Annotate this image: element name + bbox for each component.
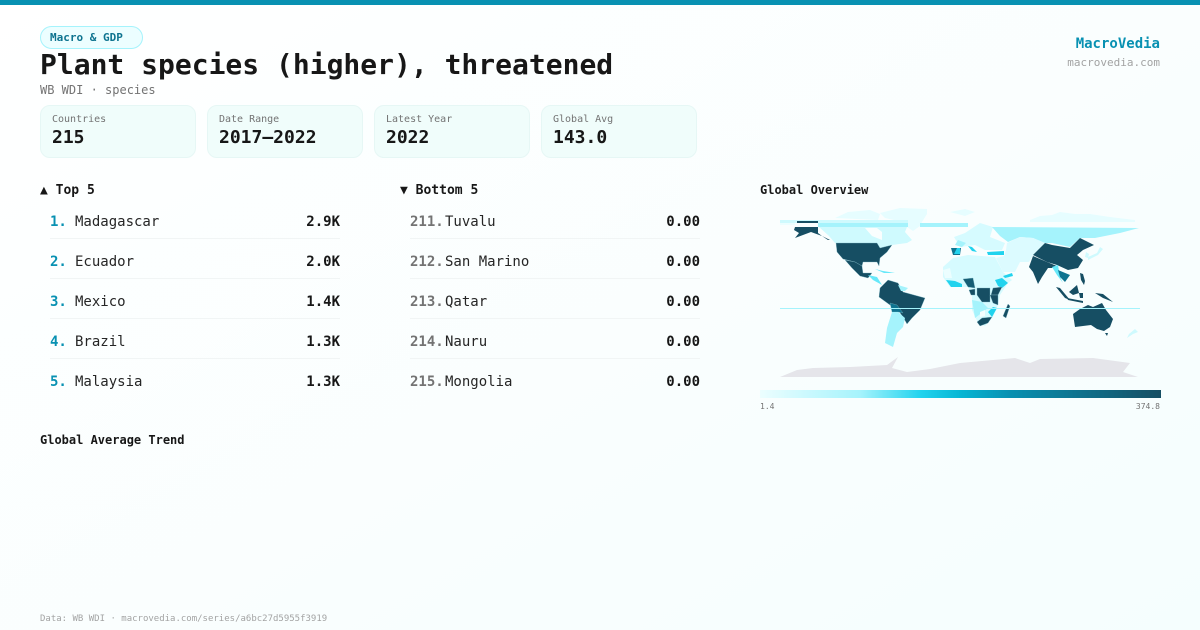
stat card: date range: 2017–2022 bbox=[219, 127, 317, 148]
stat card: latest year bbox=[374, 105, 530, 158]
brand url: macrovedia.com bbox=[1067, 56, 1160, 69]
India bbox=[1029, 256, 1057, 284]
row: Tuvalu: Tuvalu bbox=[445, 214, 496, 230]
legend maximum: 374.8 bbox=[1136, 402, 1160, 411]
row: Ecuador bbox=[50, 254, 340, 279]
Europe bbox=[951, 223, 1005, 255]
Russia bbox=[992, 227, 1139, 247]
Southeast Asia islands bbox=[1056, 273, 1113, 303]
row: Nauru: 214. bbox=[410, 334, 444, 350]
heading: global average trend: Global Average Trend bbox=[40, 433, 184, 447]
Japan and Korea bbox=[1085, 247, 1103, 260]
subtitle: WB WDI · species bbox=[40, 83, 156, 97]
row: Qatar bbox=[410, 294, 700, 319]
Australia bbox=[1073, 303, 1113, 331]
top accent bar bbox=[0, 0, 1200, 5]
row: Qatar: Qatar bbox=[445, 294, 487, 310]
row: Tuvalu: 0.00 bbox=[666, 214, 700, 230]
stat card: countries: Countries bbox=[52, 114, 106, 125]
equator artifact line bbox=[780, 308, 1140, 309]
row: Qatar: 0.00 bbox=[666, 294, 700, 310]
row: San Marino: 212. bbox=[410, 254, 444, 270]
row: Mexico: 3. bbox=[50, 294, 67, 310]
stat card: global average bbox=[541, 105, 697, 158]
row: Qatar: 213. bbox=[410, 294, 444, 310]
row: Brazil: 1.3K bbox=[306, 334, 340, 350]
row: Nauru: Nauru bbox=[445, 334, 487, 350]
row: Ecuador: 2.0K bbox=[306, 254, 340, 270]
footer source: Data: WB WDI · macrovedia.com/series/a6bc27d5955f3919 bbox=[40, 614, 327, 624]
row: Tuvalu: 211. bbox=[410, 214, 444, 230]
row: Brazil bbox=[50, 334, 340, 359]
row: Madagascar: 1. bbox=[50, 214, 67, 230]
Africa dark countries bbox=[963, 278, 1010, 326]
panel: bottom 5 list bbox=[410, 214, 700, 390]
row: Madagascar bbox=[50, 214, 340, 239]
Africa pale base bbox=[943, 255, 1012, 326]
heading: bottom 5: ▼ Bottom 5 bbox=[400, 183, 478, 198]
row: Mongolia: Mongolia bbox=[445, 374, 512, 390]
heading: top 5: ▲ Top 5 bbox=[40, 183, 95, 198]
stat card: countries bbox=[40, 105, 196, 158]
stat card: global average: 143.0 bbox=[553, 127, 607, 148]
category pill: Macro & GDP bbox=[50, 31, 123, 44]
heading: global overview: Global Overview bbox=[760, 183, 868, 197]
stat card: countries: 215 bbox=[52, 127, 85, 148]
Africa patches bbox=[943, 268, 988, 318]
panel: top 5 list bbox=[50, 214, 340, 390]
Southeast Asia mainland bbox=[1052, 265, 1070, 283]
row: Mongolia: 215. bbox=[410, 374, 444, 390]
colour scale legend bbox=[760, 390, 1161, 398]
arctic stripes bbox=[780, 220, 968, 227]
row: Malaysia: Malaysia bbox=[75, 374, 142, 390]
stat card: latest year: 2022 bbox=[386, 127, 429, 148]
Central America and Caribbean bbox=[868, 269, 895, 285]
row: Mongolia: 0.00 bbox=[666, 374, 700, 390]
New Zealand bbox=[1127, 329, 1138, 338]
row: San Marino: San Marino bbox=[445, 254, 529, 270]
row: Madagascar: Madagascar bbox=[75, 214, 159, 230]
brand block bbox=[1067, 36, 1160, 69]
row: Madagascar: 2.9K bbox=[306, 214, 340, 230]
row: Nauru bbox=[410, 334, 700, 359]
row: Nauru: 0.00 bbox=[666, 334, 700, 350]
stat card: date range bbox=[207, 105, 363, 158]
Antarctica bbox=[780, 357, 1138, 377]
title: Plant species (higher), threatened bbox=[40, 48, 613, 81]
Greenland and arctic lands bbox=[835, 208, 1135, 231]
row: Mexico: Mexico bbox=[75, 294, 126, 310]
row: Brazil: Brazil bbox=[75, 334, 126, 350]
brand name: MacroVedia bbox=[1076, 36, 1160, 52]
stat card: date range: Date Range bbox=[219, 114, 279, 125]
row: Mexico bbox=[50, 294, 340, 319]
Tasmania bbox=[1105, 333, 1108, 336]
row: Brazil: 4. bbox=[50, 334, 67, 350]
stat card: latest year: Latest Year bbox=[386, 114, 452, 125]
row: Malaysia: 5. bbox=[50, 374, 67, 390]
row: Mongolia bbox=[410, 374, 700, 390]
legend minimum: 1.4 bbox=[760, 402, 774, 411]
Central Asia and Middle East bbox=[996, 237, 1045, 272]
row: Mexico: 1.4K bbox=[306, 294, 340, 310]
stat card: global average: Global Avg bbox=[553, 114, 613, 125]
row: Tuvalu bbox=[410, 214, 700, 239]
row: Malaysia: 1.3K bbox=[306, 374, 340, 390]
South America bbox=[879, 280, 925, 347]
Canada bbox=[819, 227, 912, 248]
category pill bbox=[40, 26, 143, 49]
USA and Mexico bbox=[836, 243, 892, 278]
row: San Marino bbox=[410, 254, 700, 279]
row: Ecuador: 2. bbox=[50, 254, 67, 270]
Africa cyan countries bbox=[946, 273, 1013, 317]
row: Malaysia bbox=[50, 374, 340, 390]
world choropleth map bbox=[780, 208, 1140, 377]
China bbox=[1033, 238, 1094, 270]
row: San Marino: 0.00 bbox=[666, 254, 700, 270]
row: Ecuador: Ecuador bbox=[75, 254, 134, 270]
Alaska bbox=[794, 221, 830, 240]
